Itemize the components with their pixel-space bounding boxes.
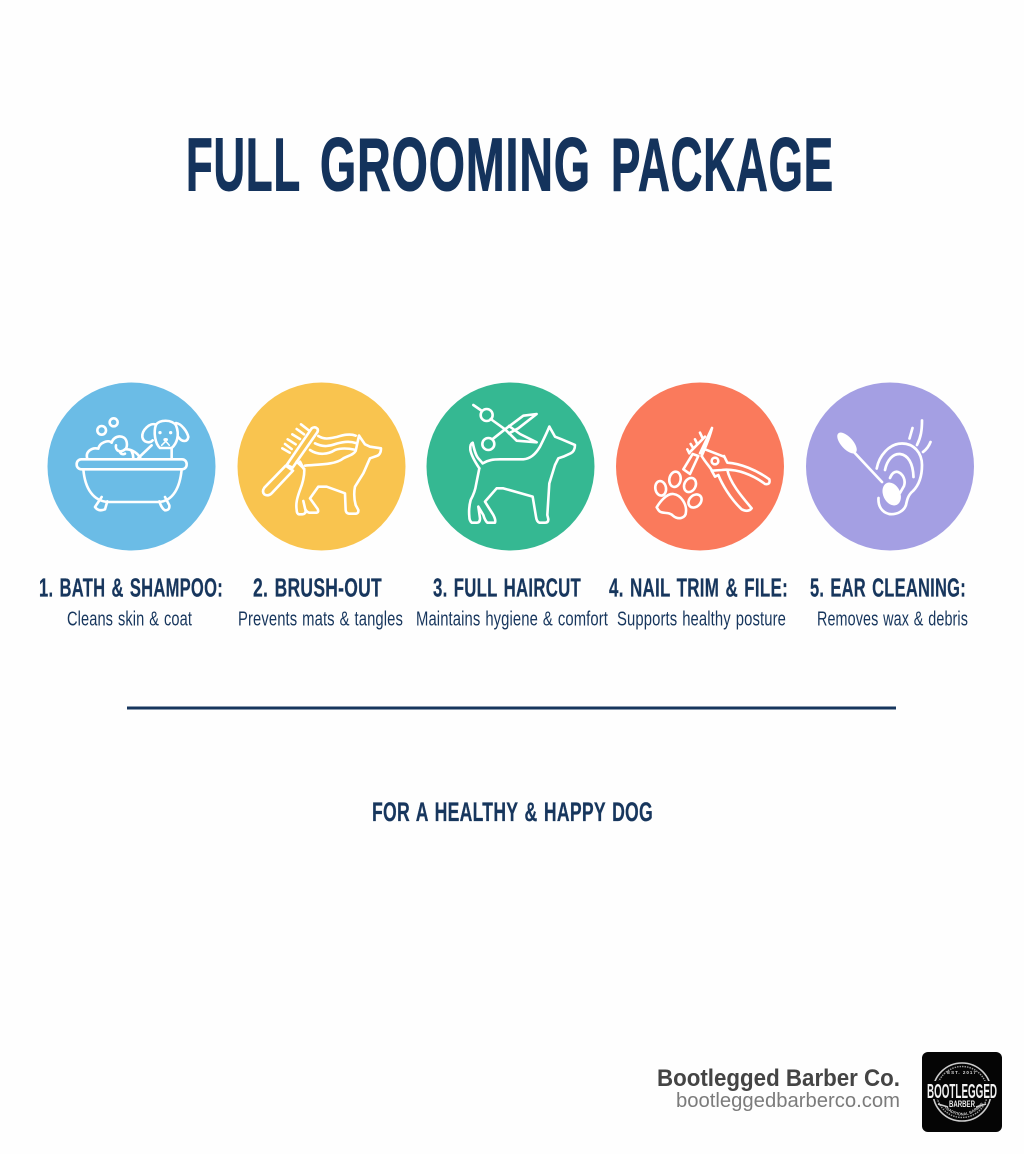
title: [186, 122, 834, 206]
icon: brush and dog: [238, 382, 406, 550]
step 2: brush-out: [238, 382, 406, 630]
icon: scissors and dog: [426, 382, 594, 550]
title: PACKAGE: [611, 122, 834, 206]
description: maintains hygiene and comfort: Maintains hygiene & comfort: [416, 608, 608, 630]
step 5: ear cleaning: [806, 382, 974, 630]
brand name: Bootlegged Barber Co.: [657, 1065, 900, 1092]
logo badge: TRADITIONAL BARBER: [944, 1102, 983, 1116]
label: nail trim and file: 4. NAIL TRIM & FILE:: [609, 574, 788, 602]
description: cleans skin and coat: Cleans skin & coat: [67, 608, 192, 630]
icon: ear and cotton swab: [806, 382, 974, 550]
tagline: FOR A HEALTHY & HAPPY DOG: [372, 797, 653, 827]
logo badge: [922, 1052, 1002, 1132]
step 3: full haircut: [416, 382, 608, 630]
description: prevents mats and tangles: Prevents mats & tangles: [238, 608, 403, 630]
label: full haircut: 3. FULL HAIRCUT: [433, 574, 581, 602]
label: bath and shampoo: 1. BATH & SHAMPOO:: [39, 574, 223, 602]
logo badge: BARBER: [949, 1099, 975, 1110]
title: GROOMING: [320, 122, 591, 206]
icon: dog in bathtub: [48, 382, 216, 550]
icon: paw and nail clippers: [616, 382, 784, 550]
step 4: nail trim and file: [609, 382, 788, 630]
title: FULL: [186, 122, 301, 206]
label: brush-out: 2. BRUSH-OUT: [253, 574, 382, 602]
logo badge: EST. 2017: [947, 1070, 977, 1075]
step 1: bath and shampoo: [39, 382, 223, 630]
brand website: bootleggedbarberco.com: [676, 1090, 900, 1112]
description: supports healthy posture: Supports healthy posture: [617, 608, 786, 630]
